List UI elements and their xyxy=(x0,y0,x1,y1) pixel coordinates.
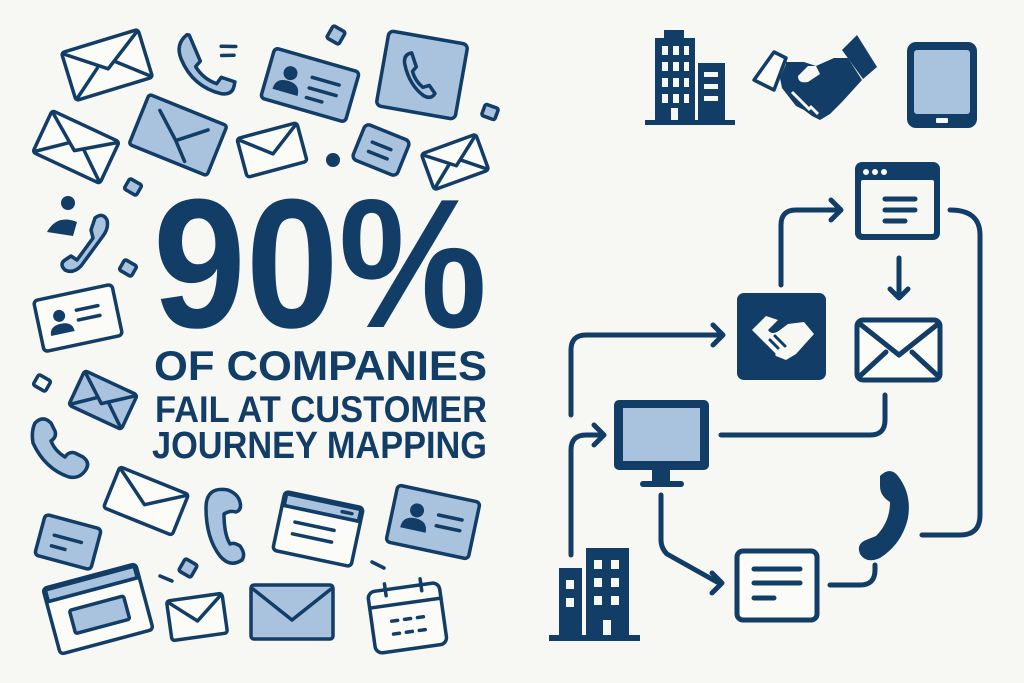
icon: envelope 1 xyxy=(61,29,153,101)
icon: id card 2 xyxy=(33,284,123,352)
icon: browser window node xyxy=(855,162,940,240)
icon: small square 3 xyxy=(124,178,142,196)
icon: top handshake xyxy=(754,35,877,120)
icon cloud: left decorative icons xyxy=(32,23,499,654)
icon: message card xyxy=(352,123,410,177)
subtitle text block xyxy=(152,342,487,467)
subtitle text block: JOURNEY MAPPING xyxy=(152,425,487,467)
icon: envelope 6 xyxy=(166,593,228,641)
icon: monitor node xyxy=(614,400,709,487)
icon: browser 2 xyxy=(43,564,153,654)
icon: person and phone xyxy=(47,196,108,271)
icon: dashes xyxy=(160,562,384,581)
flow connectors and arrows xyxy=(571,200,980,593)
icon: envelope 2 xyxy=(33,111,119,183)
icon: message card 2 xyxy=(35,514,101,570)
icon: envelope 4 xyxy=(421,134,489,190)
subtitle text block: FAIL AT CUSTOMER xyxy=(155,389,487,430)
icon: phone square xyxy=(376,31,468,119)
icon: phone 2 xyxy=(32,419,88,477)
icon: calendar xyxy=(367,576,447,654)
icon: envelope light 3 xyxy=(251,585,333,639)
icon: small square 4 xyxy=(119,259,137,277)
icon: envelope light xyxy=(129,94,227,176)
icon: top building xyxy=(645,30,735,125)
icon: handshake node xyxy=(737,293,826,380)
icon: envelope 5 xyxy=(103,467,189,535)
icon: small square 2 xyxy=(481,104,499,120)
icon: browser 1 xyxy=(273,491,363,567)
icon: small diamond xyxy=(326,25,346,45)
icon: top tablet xyxy=(907,42,977,128)
subtitle text block: OF COMPANIES xyxy=(154,342,487,389)
icon: small square 6 xyxy=(178,558,198,578)
icon: envelope node xyxy=(857,320,940,380)
icon: phone node xyxy=(859,471,909,560)
icon: building node xyxy=(549,548,640,641)
icon: document node xyxy=(737,551,817,620)
icon: id card 1 xyxy=(261,48,359,122)
icon: small square 5 xyxy=(33,374,51,392)
icon: dot xyxy=(326,153,340,167)
icon: id card 3 xyxy=(386,485,480,559)
icon: phone 1 xyxy=(175,23,247,103)
icon: envelope 3 xyxy=(237,123,307,177)
icon: phone 3 xyxy=(206,489,244,563)
title: 90%: 90% xyxy=(153,160,487,366)
icon: envelope light 2 xyxy=(69,371,137,429)
